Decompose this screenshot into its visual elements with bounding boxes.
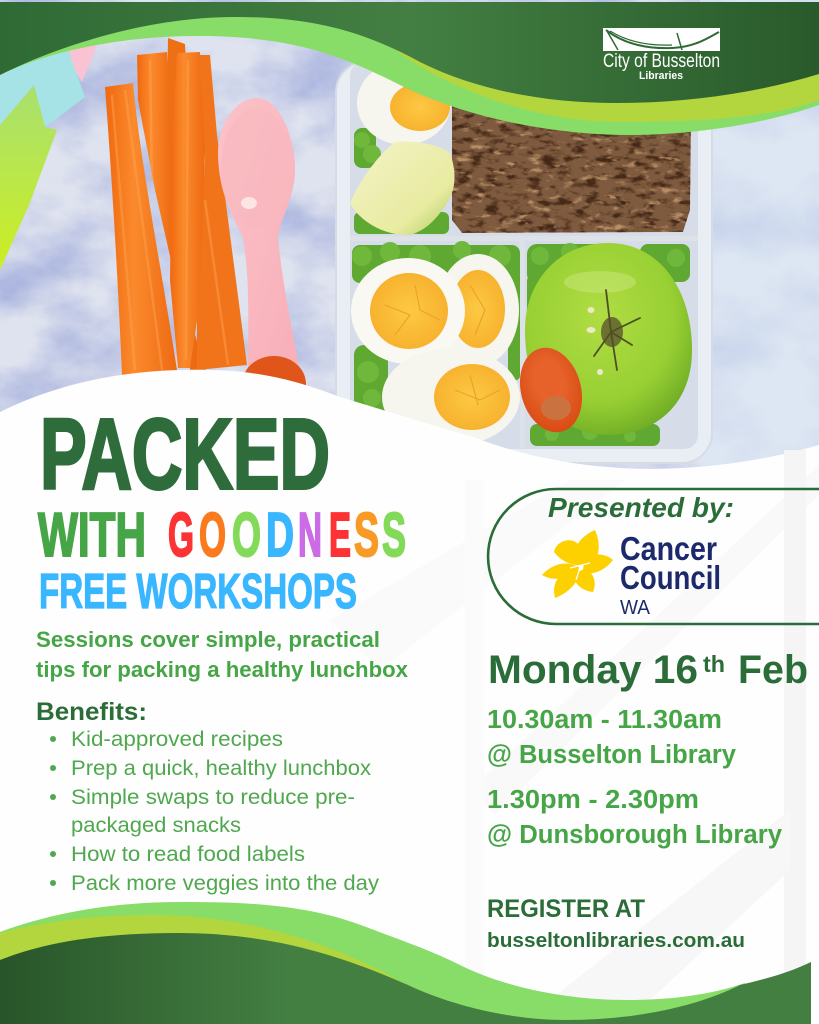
cherry tomato (242, 356, 306, 412)
green apple (525, 243, 692, 435)
title: goodness: O (199, 501, 226, 570)
top egg (357, 61, 451, 145)
session: dunsborough (487, 786, 783, 849)
apple slice (350, 142, 454, 235)
light green band (0, 902, 745, 1024)
benefits list: Simple swaps to reduce pre- (71, 785, 355, 809)
intro text: tips for packing a healthy lunchbox (36, 657, 409, 682)
presented by pill (488, 489, 819, 624)
title (38, 398, 406, 619)
cancer council name: Council (620, 559, 721, 596)
dark green band (0, 2, 819, 103)
lime band (390, 40, 819, 122)
session: dunsborough: @ Dunsborough Library (487, 821, 783, 849)
session: busselton: @ Busselton Library (487, 741, 737, 769)
tomato slice (511, 341, 591, 439)
cancer council name: WA (620, 597, 651, 619)
benefits list: Prep a quick, healthy lunchbox (71, 756, 371, 780)
cancer council name: Cancer (620, 530, 717, 567)
marble background (0, 0, 819, 480)
lunchbox (336, 61, 712, 463)
pink spoon (218, 98, 300, 372)
title: goodness: E (329, 501, 351, 570)
bottom wave banner (0, 902, 811, 1024)
logo: City of Busselton Libraries (603, 28, 720, 82)
cancer council name (620, 530, 721, 619)
date heading (488, 648, 808, 692)
date heading: Monday 16 (488, 648, 698, 692)
presented by label: Presented by: (548, 492, 734, 523)
subtitle: free workshops: FREE WORKSHOPS (39, 565, 357, 619)
photo: lunchbox on marble (0, 0, 819, 480)
top wave banner (0, 2, 819, 135)
carrot sticks (105, 38, 247, 375)
registration: REGISTER AT (487, 895, 645, 923)
registration: busseltonlibraries.com.au (487, 930, 745, 952)
intro text: Sessions cover simple, practical (36, 627, 380, 652)
title: with: WITH (38, 501, 146, 570)
logo subtitle: Libraries (639, 70, 683, 82)
title: packed: PACKED (40, 398, 330, 510)
logo name: City of Busselton (603, 51, 720, 72)
title: goodness: O (232, 501, 261, 570)
benefits list: Kid-approved recipes (71, 727, 283, 751)
date heading: Feb (738, 648, 808, 692)
bread (452, 105, 691, 233)
session: busselton (487, 706, 737, 769)
light green band (0, 2, 819, 135)
lime band (0, 915, 412, 1000)
pill outline (488, 489, 819, 624)
benefits heading: Benefits: (36, 698, 147, 726)
boiled eggs (351, 254, 520, 446)
registration (487, 895, 745, 952)
title: goodness: D (266, 501, 294, 570)
session: dunsborough: 1.30pm - 2.30pm (487, 786, 699, 814)
benefits list: How to read food labels (71, 842, 305, 866)
date heading: th (703, 651, 725, 677)
intro text (36, 627, 409, 682)
title: goodness: N (298, 501, 322, 570)
white content panel (0, 370, 819, 1024)
title: goodness: S (354, 501, 379, 570)
dark green band (0, 933, 811, 1024)
benefits list (50, 727, 379, 895)
dividers (350, 236, 698, 448)
logo emblem (603, 28, 720, 51)
benefits list: Pack more veggies into the day (71, 871, 379, 895)
lettuce (352, 128, 690, 446)
session: busselton: 10.30am - 11.30am (487, 706, 722, 734)
benefits list: packaged snacks (71, 813, 241, 837)
title: goodness: G (168, 501, 194, 570)
paper shapes (0, 46, 97, 270)
title: goodness (168, 501, 406, 570)
title: goodness: S (382, 501, 406, 570)
icon: daffodil (542, 530, 613, 598)
